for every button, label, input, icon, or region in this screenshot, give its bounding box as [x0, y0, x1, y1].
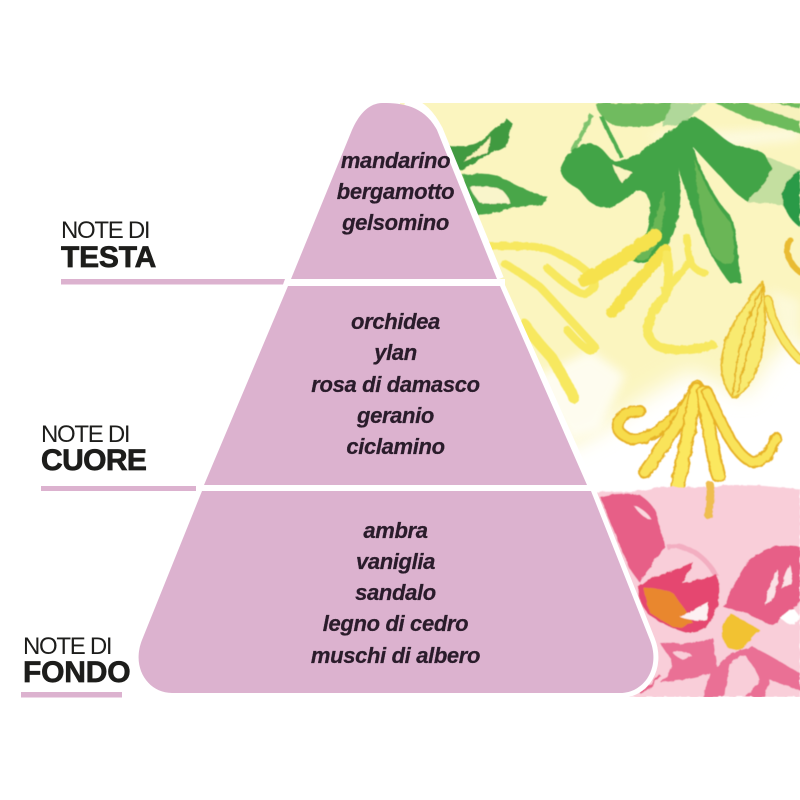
tier: heart notes	[204, 286, 589, 485]
upper bud	[722, 282, 765, 398]
notes list: cuore: orchidea	[351, 309, 440, 334]
label: note di cuore: NOTE DI	[41, 421, 129, 448]
watercolor botanical illustration	[400, 103, 800, 697]
notes list: fondo: legno di cedro	[323, 611, 468, 636]
label: note di fondo: FONDO	[23, 656, 130, 689]
pyramid	[139, 100, 653, 693]
notes list: cuore: ylan	[373, 340, 417, 365]
label: note di testa: TESTA	[61, 241, 156, 274]
label: note di cuore: CUORE	[41, 444, 146, 477]
notes list: fondo: ambra	[363, 518, 428, 543]
notes list: fondo: muschi di albero	[311, 643, 480, 668]
tier: top notes	[291, 100, 499, 279]
notes list: cuore: rosa di damasco	[311, 372, 480, 397]
label: note di testa: NOTE DI	[61, 217, 149, 244]
notes list: fondo: sandalo	[355, 580, 436, 605]
notes list: cuore	[311, 309, 480, 459]
tier: base notes	[139, 491, 653, 693]
pale yellow wash	[400, 103, 800, 452]
notes list: testa	[337, 148, 454, 235]
yellow stems	[490, 236, 712, 398]
notes list: cuore: geranio	[356, 403, 434, 428]
label: note di fondo	[21, 633, 130, 698]
label: note di fondo: NOTE DI	[23, 633, 111, 660]
yellow flowers	[617, 240, 800, 485]
notes list: testa: bergamotto	[337, 179, 454, 204]
white gap between tiers	[439, 279, 505, 286]
lower flower petals	[617, 387, 697, 439]
label: note di testa	[61, 217, 285, 284]
notes list: cuore: ciclamino	[346, 434, 445, 459]
notes list: testa: gelsomino	[341, 210, 449, 235]
pink flowers	[590, 485, 800, 697]
notes list: testa: mandarino	[341, 148, 450, 173]
label: note di cuore	[41, 421, 196, 491]
green leaves	[447, 103, 800, 283]
notes list: fondo: vaniglia	[356, 549, 435, 574]
notes list: fondo	[311, 518, 480, 668]
